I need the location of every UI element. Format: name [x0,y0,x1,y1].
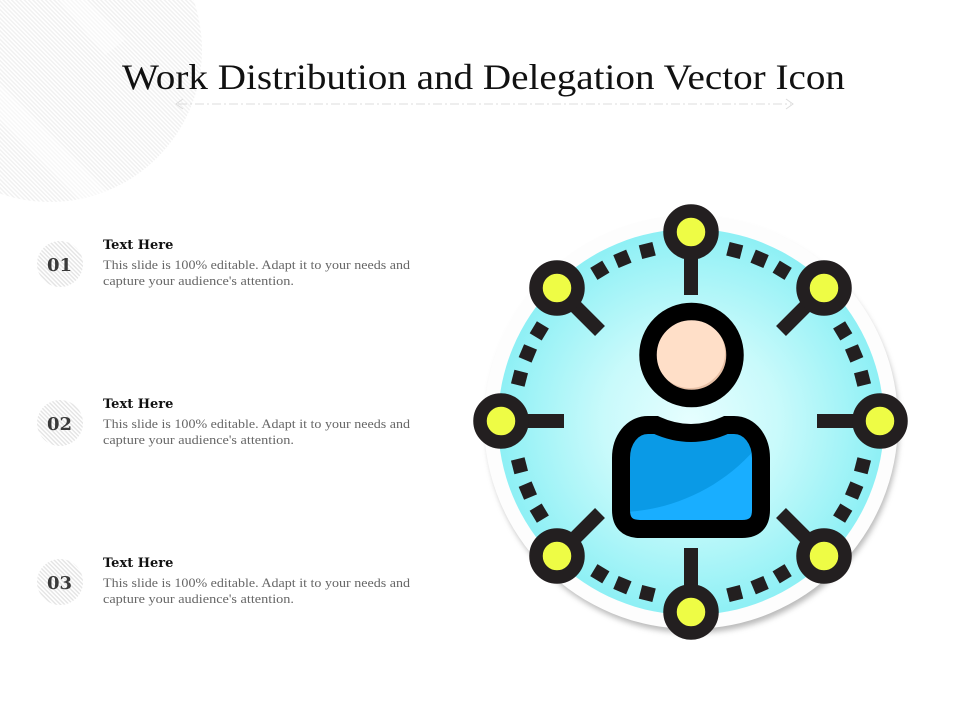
title divider arrow [176,99,793,109]
decorative hatched corner [0,0,205,205]
person body [621,420,761,529]
disc background [484,215,899,633]
number badge 03: 03 [47,573,72,594]
item 03 [37,556,411,606]
body 01: This slide is 100% editable. Adapt it to your needs and [103,258,411,272]
heading 01: Text Here [103,238,173,253]
heading 03: Text Here [103,556,173,571]
body 02: This slide is 100% editable. Adapt it to your needs and [103,417,411,431]
item 01 [37,238,411,288]
title: Work Distribution and Delegation Vector Icon [122,57,845,97]
delegation network icon [480,211,901,633]
number badge 02: 02 [47,414,72,435]
number badge 01: 01 [47,255,72,276]
body 03: This slide is 100% editable. Adapt it to your needs and [103,576,411,590]
body 02: capture your audience's attention. [103,433,294,447]
connector lines [501,232,880,612]
number badge 01 [37,241,83,287]
body 01: capture your audience's attention. [103,274,294,288]
heading 02: Text Here [103,397,173,412]
body 03 [103,576,411,606]
person head [648,312,735,398]
number badge 03 [37,559,83,605]
dotted ring [511,242,871,602]
body 02 [103,417,411,447]
number badge 02 [37,400,83,446]
body 03: capture your audience's attention. [103,592,294,606]
outer nodes [480,211,901,633]
item 02 [37,397,411,447]
body 01 [103,258,411,288]
